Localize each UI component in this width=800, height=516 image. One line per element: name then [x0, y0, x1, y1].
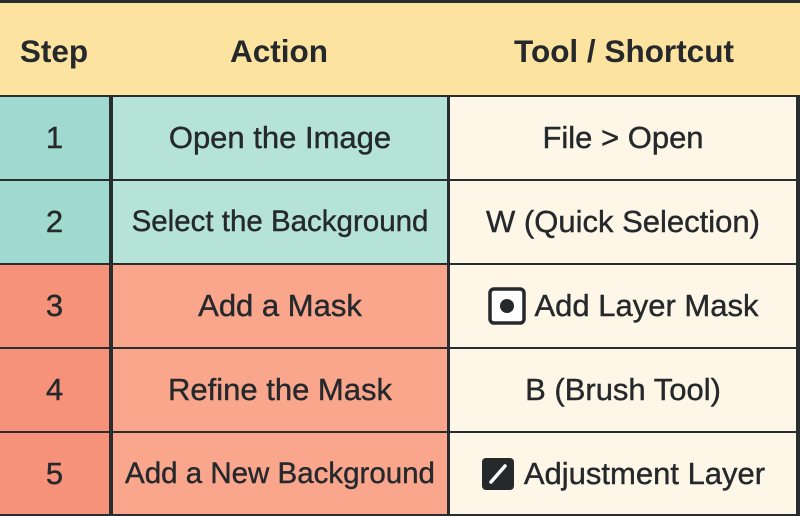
action 4: Refine the Mask	[168, 372, 392, 407]
row 1	[0, 97, 796, 179]
header: Step: Step	[20, 32, 88, 68]
action 4	[113, 349, 447, 431]
header: Action: Action	[230, 32, 328, 68]
row 5	[0, 433, 796, 514]
header row	[0, 3, 800, 95]
tool 2	[450, 181, 796, 263]
action 5	[113, 433, 447, 514]
step 3	[0, 265, 109, 347]
step 1: 1	[46, 120, 63, 155]
header: Tool / Shortcut: Tool / Shortcut	[514, 32, 734, 68]
action 1	[113, 97, 447, 179]
tool 1: File > Open	[542, 120, 704, 155]
tool 4	[450, 349, 796, 431]
tool 3: Add Layer Mask	[534, 288, 758, 323]
step 2	[0, 181, 109, 263]
action 1: Open the Image	[169, 120, 391, 155]
step 3: 3	[46, 288, 63, 323]
row 3	[0, 265, 796, 347]
tool 2: W (Quick Selection)	[486, 204, 760, 239]
action 5: Add a New Background	[125, 456, 435, 490]
row 2	[0, 181, 796, 263]
tool 3	[450, 265, 796, 347]
step 4	[0, 349, 109, 431]
action 2	[113, 181, 447, 263]
tool 5	[450, 433, 796, 514]
step 4: 4	[46, 372, 63, 407]
step 5	[0, 433, 109, 514]
row 4	[0, 349, 796, 431]
action 3	[113, 265, 447, 347]
tool 5: Adjustment Layer	[524, 456, 765, 490]
step 5: 5	[46, 456, 63, 490]
tool 4: B (Brush Tool)	[525, 372, 721, 407]
step 2: 2	[46, 204, 63, 239]
tool 1	[450, 97, 796, 179]
step 1	[0, 97, 109, 179]
action 3: Add a Mask	[198, 288, 362, 323]
action 2: Select the Background	[132, 205, 428, 238]
